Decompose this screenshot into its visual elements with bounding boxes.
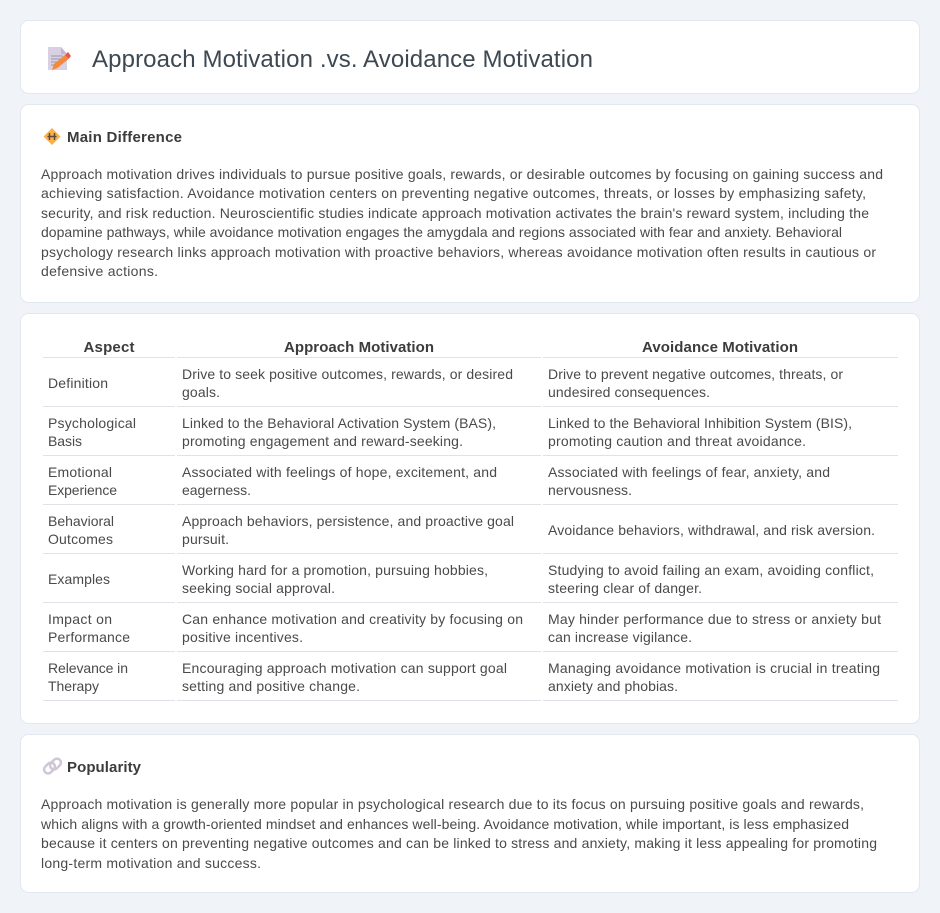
row: behavioral outcomes: Approach behaviors, persistence, and proactive goal (182, 513, 514, 529)
row: relevance in therapy: anxiety and phobias. (548, 678, 678, 694)
row: definition: undesired consequences. (548, 384, 710, 400)
text block: main difference paragraph: achieving satisfaction. Avoidance motivation centers on preventing negative outcomes, threats, or losses by emphasizing safety, (41, 185, 866, 201)
icon: diamond sign (44, 128, 60, 145)
row: psychological basis: promoting engagement and reward-seeking. (182, 433, 463, 449)
row: behavioral outcomes: Avoidance behaviors, withdrawal, and risk aversion. (548, 522, 875, 538)
row: definition: Drive to seek positive outcomes, rewards, or desired (182, 366, 513, 382)
text block: main difference paragraph: dopamine pathways, while avoidance motivation engages the amygdala and regions associated with fear and anxiety. Behavioral (41, 224, 842, 240)
title: Approach Motivation .vs. Avoidance Motivation (92, 46, 593, 73)
row: emotional experience: Emotional (48, 464, 112, 480)
row: relevance in therapy (48, 660, 880, 694)
row: psychological basis: Basis (48, 433, 82, 449)
text block: popularity paragraph: long-term motivation and success. (41, 855, 261, 871)
row: relevance in therapy: setting and positive change. (182, 678, 360, 694)
row: impact on performance: Impact on (48, 611, 112, 627)
panel: comparison table (20, 314, 920, 724)
text block: popularity paragraph (40, 796, 877, 871)
panel: main difference (20, 104, 920, 302)
row: emotional experience: eagerness. (182, 482, 251, 498)
row: relevance in therapy: Relevance in (48, 660, 128, 676)
row: examples (48, 562, 874, 596)
row: impact on performance: positive incentives. (182, 629, 303, 645)
table header: Aspect (84, 339, 134, 356)
heading: main difference: Main Difference (67, 129, 182, 146)
row: impact on performance: May hinder performance due to stress or anxiety but (548, 611, 881, 627)
row: emotional experience: Associated with feelings of hope, excitement, and (182, 464, 497, 480)
row: definition: goals. (182, 384, 220, 400)
row: relevance in therapy: Managing avoidance motivation is crucial in treating (548, 660, 880, 676)
text block: popularity paragraph: because it centers on preventing negative outcomes and can be linked to stress and anxiety, making it less appealing for promoting (41, 835, 877, 851)
row: examples: seeking social approval. (182, 580, 335, 596)
text block: popularity paragraph: which aligns with a growth-oriented mindset and enhances well-being. Avoidance motivation, while important, is less emphasized (40, 816, 849, 832)
row: behavioral outcomes: pursuit. (182, 531, 229, 547)
row: behavioral outcomes: Behavioral (48, 513, 114, 529)
icon: memo with pencil (48, 47, 71, 70)
heading: popularity: Popularity (67, 759, 142, 776)
row: examples: Studying to avoid failing an exam, avoiding conflict, (548, 562, 874, 578)
row: impact on performance: Performance (48, 629, 130, 645)
text block: main difference paragraph: psychology research links approach motivation with proactive behaviors, whereas avoidance motivation often results in cautious or (41, 244, 876, 260)
table header (84, 339, 798, 356)
row: emotional experience (48, 464, 830, 498)
text block: main difference paragraph: defensive actions. (41, 263, 158, 279)
table header: Avoidance Motivation (642, 339, 798, 356)
row: definition: Drive to prevent negative outcomes, threats, or (548, 366, 843, 382)
row: impact on performance: Can enhance motivation and creativity by focusing on (182, 611, 523, 627)
row: impact on performance (48, 611, 881, 645)
row: behavioral outcomes: Outcomes (48, 531, 113, 547)
text block: popularity paragraph: Approach motivation is generally more popular in psychological research due to its focus on pursuing positive goals and rewards, (41, 796, 864, 812)
row: examples: Examples (48, 571, 110, 587)
row: emotional experience: Associated with feelings of fear, anxiety, and (548, 464, 830, 480)
row: behavioral outcomes (48, 513, 875, 547)
panel: popularity (20, 734, 920, 892)
text block: main difference paragraph (41, 166, 883, 279)
row: relevance in therapy: Therapy (48, 678, 99, 694)
panel: header (20, 20, 920, 94)
text block: main difference paragraph: Approach motivation drives individuals to pursue positive goals, rewards, or desirable outcomes by focusing on gaining success and (41, 166, 883, 182)
row: psychological basis (48, 415, 852, 449)
row: emotional experience: nervousness. (548, 482, 632, 498)
row: impact on performance: can increase vigilance. (548, 629, 692, 645)
row: emotional experience: Experience (48, 482, 117, 498)
row: relevance in therapy: Encouraging approach motivation can support goal (182, 660, 507, 676)
row: definition: Definition (48, 375, 108, 391)
row: psychological basis: Psychological (48, 415, 136, 431)
row: definition (48, 366, 843, 400)
row: examples: steering clear of danger. (548, 580, 702, 596)
table header: Approach Motivation (284, 339, 434, 356)
row: psychological basis: promoting caution and threat avoidance. (548, 433, 806, 449)
row: psychological basis: Linked to the Behavioral Activation System (BAS), (182, 415, 496, 431)
row: psychological basis: Linked to the Behavioral Inhibition System (BIS), (548, 415, 852, 431)
icon: chain link (42, 757, 63, 775)
text block: main difference paragraph: security, and risk reduction. Neuroscientific studies indicate approach motivation activates the brain's reward system, including the (41, 205, 869, 221)
row: examples: Working hard for a promotion, pursuing hobbies, (182, 562, 488, 578)
